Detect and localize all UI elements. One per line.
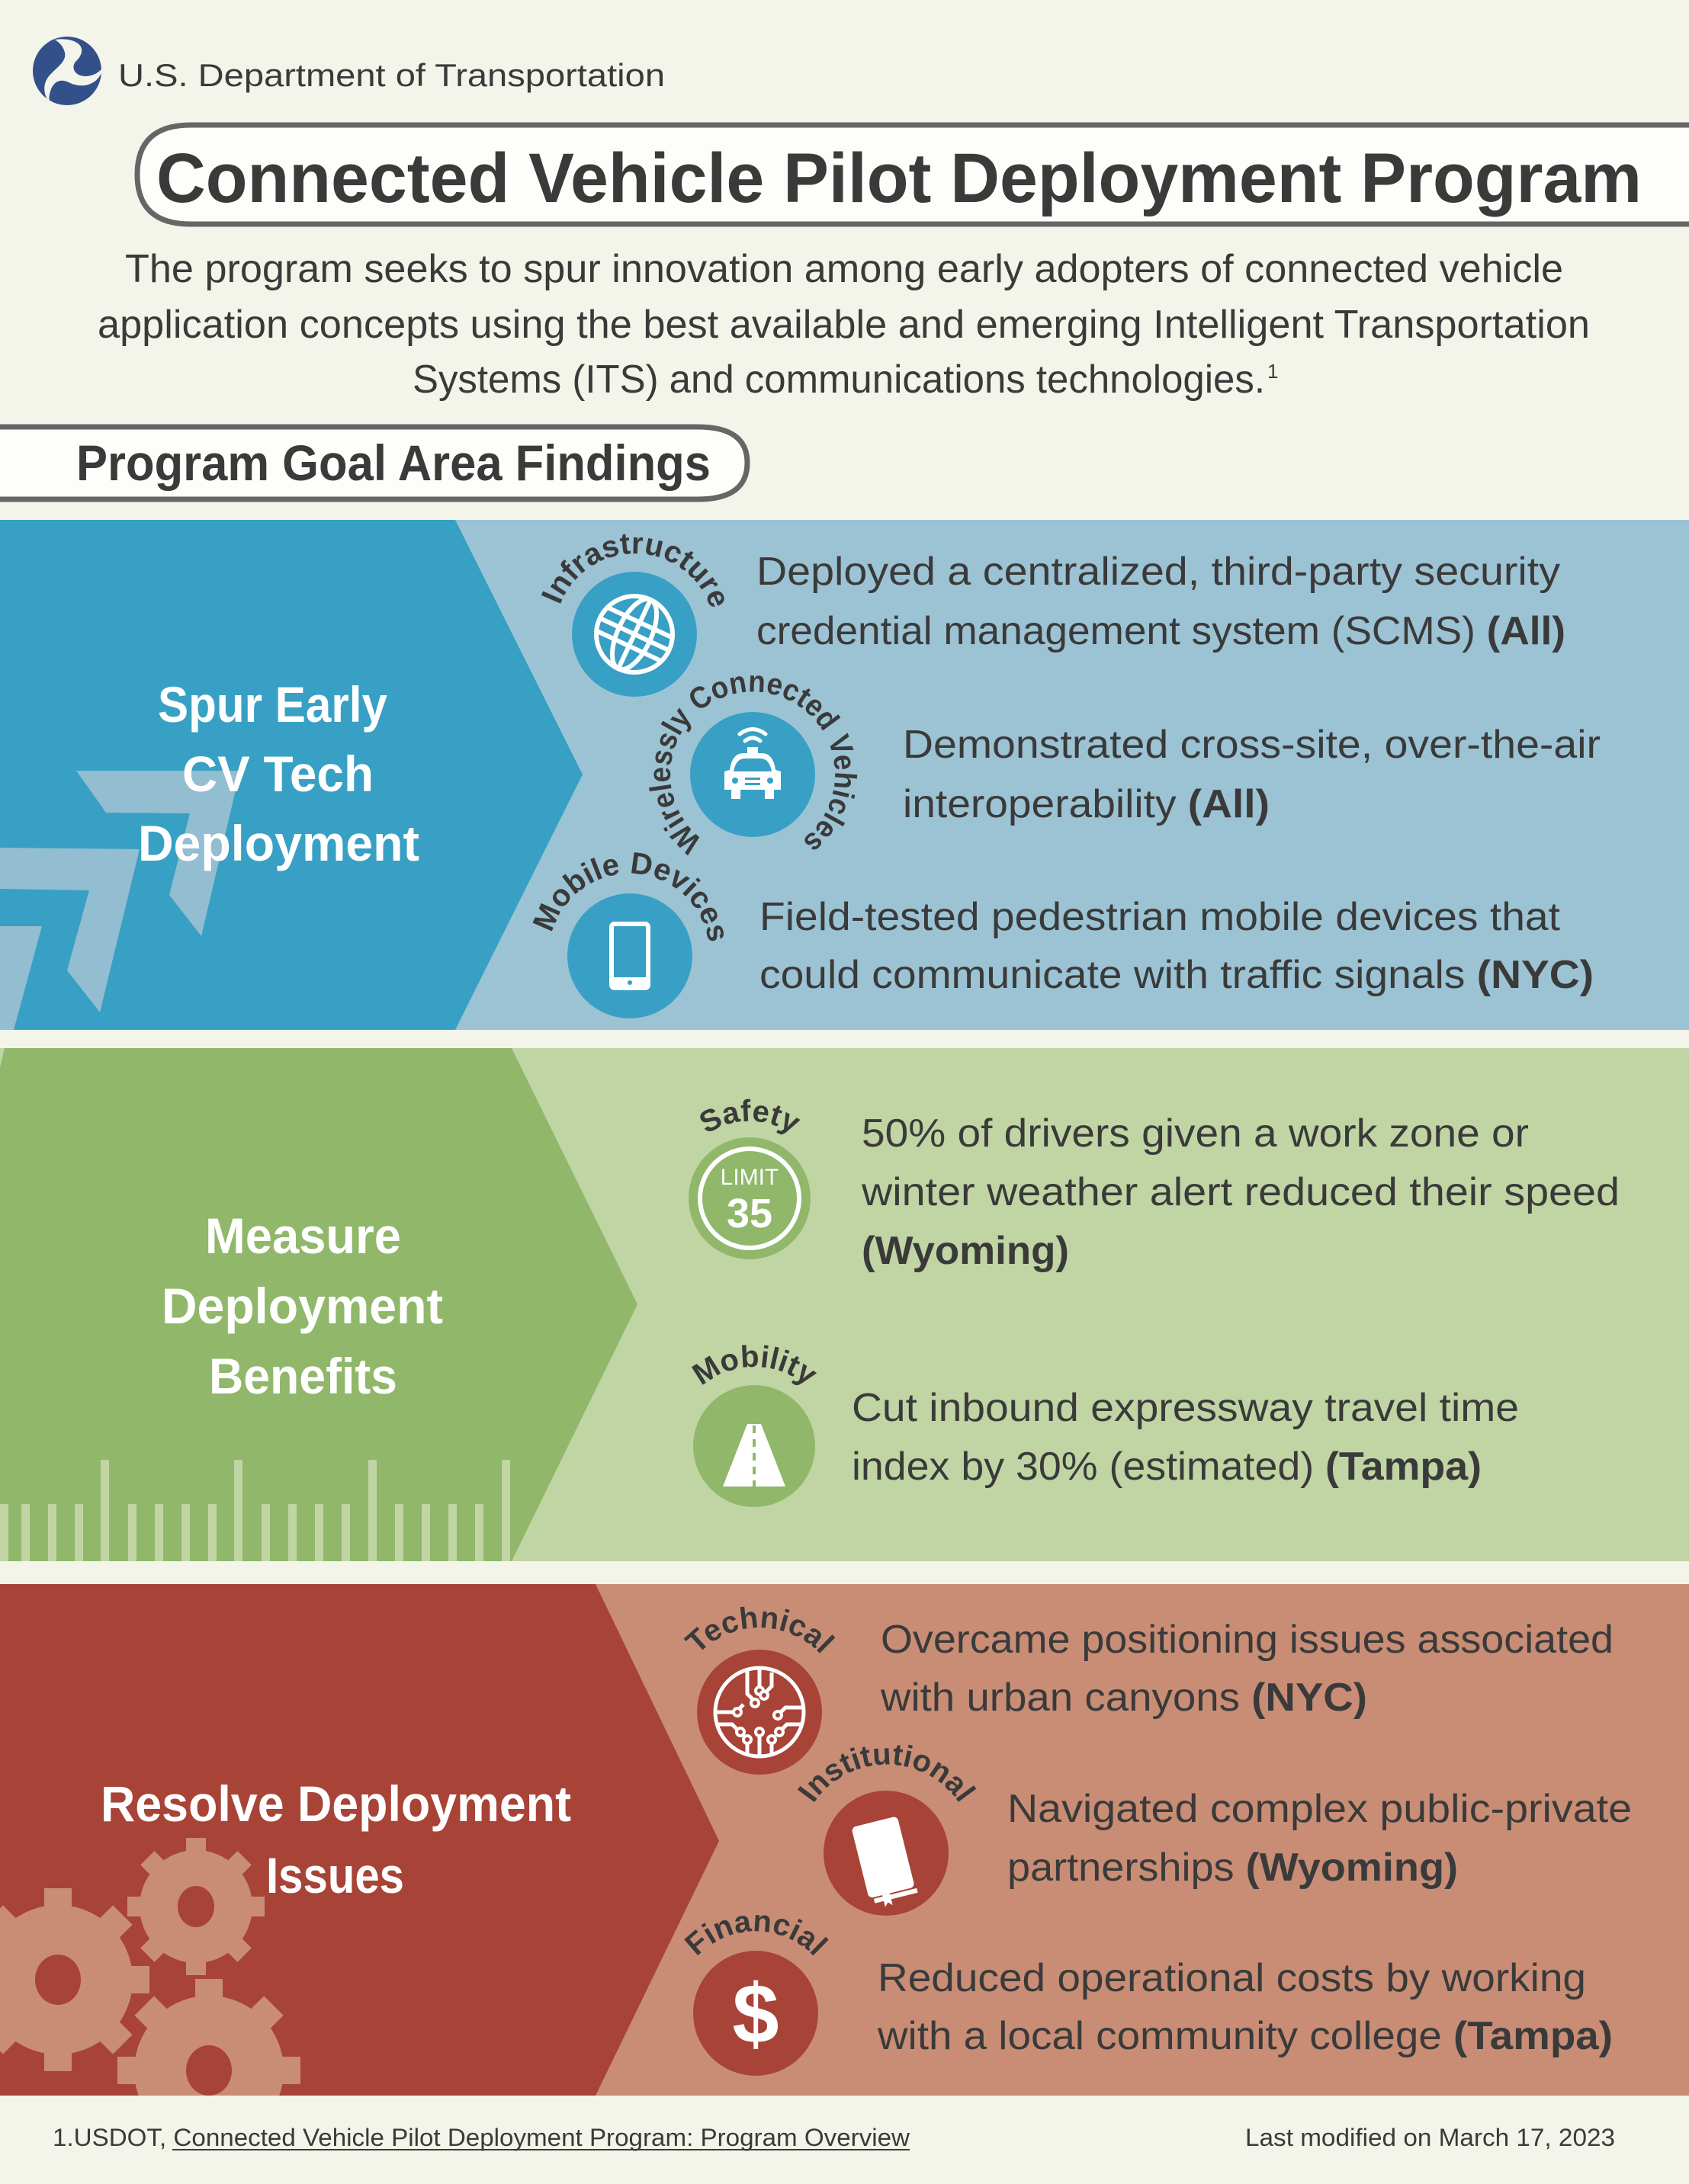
text: speed reduction finding: winter weather alert reduced their speed <box>861 1170 1620 1214</box>
text: speed reduction finding <box>861 1111 1620 1273</box>
logo: USDOT <box>33 37 104 105</box>
text: SCMS finding: Deployed a centralized, third-party security <box>756 550 1560 594</box>
icon: Safety speed limit: Safety <box>700 1099 801 1134</box>
icon: Technical circuit <box>683 1607 836 1775</box>
icon: Safety speed limit <box>689 1099 811 1259</box>
icon: Institutional book <box>798 1744 976 1916</box>
panel: Spur Early CV Tech Deployment <box>0 520 1689 1030</box>
icon: Technical circuit: Technical <box>683 1607 836 1653</box>
icon: Mobility road <box>692 1345 817 1507</box>
heading: Spur Early CV Tech Deployment: CV Tech <box>182 746 374 802</box>
icon: Financial dollar <box>684 1915 829 2076</box>
icon: Financial dollar: Financial <box>684 1915 829 1956</box>
text: interoperability finding: Demonstrated cross-site, over-the-air <box>903 723 1601 767</box>
heading: Measure Deployment Benefits: Deployment <box>162 1278 443 1334</box>
heading: Measure Deployment Benefits: Benefits <box>209 1348 397 1404</box>
icon: Infrastructure globe: Infrastructure <box>541 534 724 607</box>
intro paragraph: Systems (ITS) and communications technologies. <box>413 358 1265 402</box>
text: SCMS finding <box>756 550 1565 653</box>
text: positioning finding <box>880 1618 1614 1720</box>
panel: Measure Deployment Benefits <box>0 1048 1689 1561</box>
heading: Measure Deployment Benefits <box>162 1207 443 1404</box>
header: agency name: U.S. Department of Transportation <box>118 57 665 93</box>
text: mobile devices finding: could communicate with traffic signals (NYC) <box>759 953 1594 997</box>
text: costs finding: with a local community college (Tampa) <box>877 2014 1613 2058</box>
text: travel time finding: Cut inbound expressway travel time <box>852 1386 1519 1430</box>
heading: Resolve Deployment Issues: Resolve Deployment <box>101 1775 571 1832</box>
text: costs finding: Reduced operational costs by working <box>878 1956 1586 2000</box>
heading: Resolve Deployment Issues <box>101 1775 571 1903</box>
text: partnerships finding <box>1007 1787 1632 1890</box>
icon: Wirelessly Connected Vehicles: Wirelessly Connected Vehicles <box>649 675 857 855</box>
footer: citation: 1.USDOT, Connected Vehicle Pilot Deployment Program: Program Overview <box>53 2124 910 2151</box>
footer: last modified: Last modified on March 17, 2023 <box>1245 2124 1615 2151</box>
icon: Mobile Devices <box>532 852 724 1018</box>
text: mobile devices finding <box>759 895 1594 997</box>
text: mobile devices finding: Field-tested pedestrian mobile devices that <box>759 895 1561 939</box>
icon: Safety speed limit: LIMIT <box>721 1165 779 1190</box>
title box: Connected Vehicle Pilot Deployment Program <box>156 140 1642 217</box>
text: positioning finding: with urban canyons (NYC) <box>880 1676 1367 1720</box>
text: SCMS finding: credential management system (SCMS) (All) <box>756 609 1565 653</box>
icon: Institutional book: Institutional <box>798 1744 976 1802</box>
icon: Safety speed limit: 35 <box>727 1191 772 1236</box>
text: costs finding <box>877 1956 1613 2058</box>
text: positioning finding: Overcame positioning issues associated <box>881 1618 1614 1662</box>
section heading: Program Goal Area Findings: Program Goal Area Findings <box>76 435 711 491</box>
text: partnerships finding: Navigated complex public-private <box>1007 1787 1632 1831</box>
icon: Financial dollar: $ <box>732 1968 779 2061</box>
text: speed reduction finding: 50% of drivers given a work zone or <box>862 1111 1529 1156</box>
intro paragraph: The program seeks to spur innovation among early adopters of connected vehicle <box>125 247 1563 291</box>
heading: Spur Early CV Tech Deployment: Spur Early <box>158 676 387 733</box>
panel: Resolve Deployment Issues <box>0 1584 1689 2096</box>
icon: Mobility road: Mobility <box>692 1345 817 1386</box>
intro paragraph <box>98 247 1590 402</box>
text: travel time finding <box>852 1386 1519 1489</box>
text: partnerships finding: partnerships (Wyoming) <box>1007 1846 1458 1890</box>
section heading: Program Goal Area Findings <box>0 427 747 499</box>
heading: Resolve Deployment Issues: Issues <box>266 1847 404 1903</box>
text: interoperability finding <box>903 723 1601 826</box>
text: travel time finding: index by 30% (estimated) (Tampa) <box>852 1445 1482 1489</box>
icon: Infrastructure globe <box>541 534 724 697</box>
heading: Measure Deployment Benefits: Measure <box>205 1207 401 1264</box>
text: interoperability finding: interoperability (All) <box>903 782 1270 826</box>
heading: Spur Early CV Tech Deployment: Deployment <box>138 815 419 871</box>
intro paragraph: application concepts using the best available and emerging Intelligent Transportation <box>98 303 1590 347</box>
icon: Mobile Devices: Mobile Devices <box>532 852 724 941</box>
text: speed reduction finding: (Wyoming) <box>862 1229 1069 1273</box>
gears decoration <box>0 1838 300 2096</box>
heading: Spur Early CV Tech Deployment <box>138 676 419 871</box>
intro paragraph: 1 <box>1267 360 1278 383</box>
